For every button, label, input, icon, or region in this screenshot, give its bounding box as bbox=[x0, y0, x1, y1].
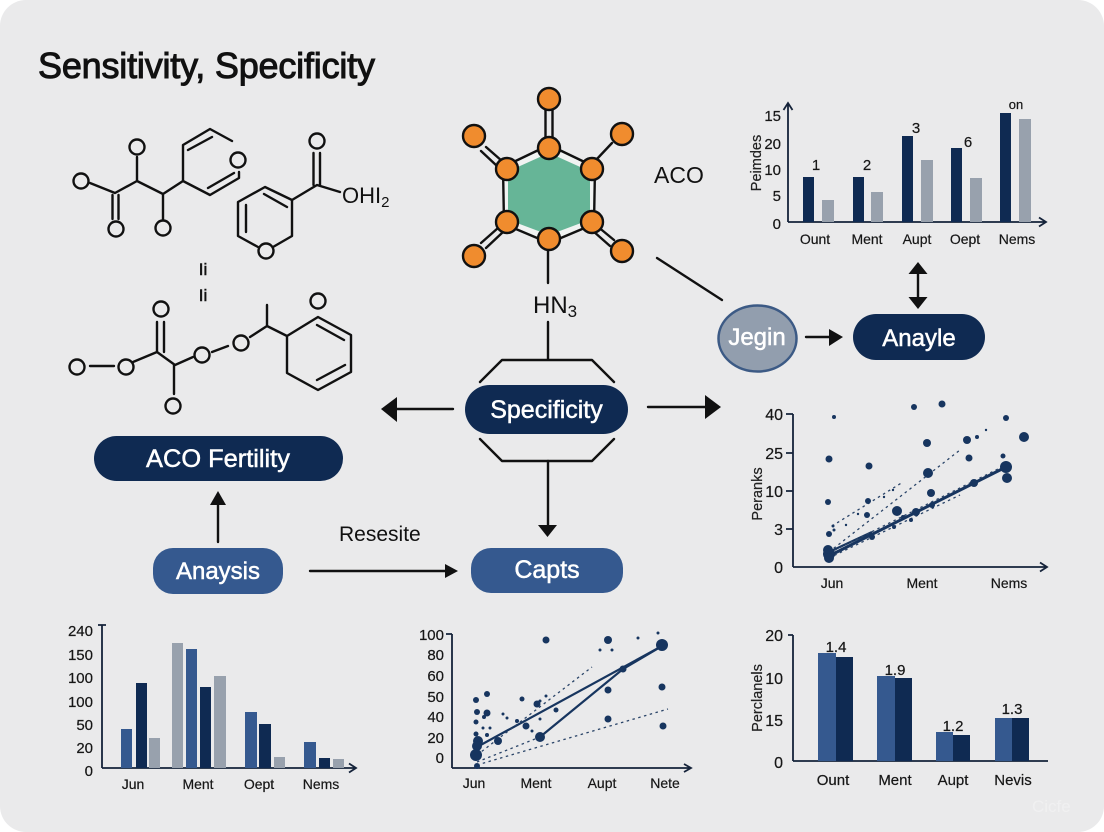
pill: Specificity: Specificity bbox=[490, 396, 603, 424]
pill: Anayle bbox=[853, 314, 985, 360]
label: HN3: 3 bbox=[568, 302, 577, 321]
bar chart: bottom left: Jun bbox=[122, 776, 144, 792]
bar chart: bottom right: Ount bbox=[817, 772, 850, 789]
scatter chart: bottom middle: Jun bbox=[463, 775, 485, 791]
pill: ACO Fertility bbox=[94, 436, 343, 481]
bar chart: top right: Ment bbox=[851, 231, 883, 247]
node: Jegin bbox=[718, 306, 796, 372]
bar chart: bottom left: 20 bbox=[76, 740, 93, 757]
pill: Capts bbox=[471, 548, 623, 593]
arrow: Jegin to Anayle bbox=[806, 329, 843, 346]
scatter chart: bottom middle: 80 bbox=[427, 647, 444, 664]
scatter chart: bottom middle: 0 bbox=[436, 750, 444, 767]
bar chart: top right: 0 bbox=[773, 216, 781, 233]
molecule: top middle ring with OHI2: OHI bbox=[342, 183, 381, 208]
scatter chart: bottom middle: 50 bbox=[427, 689, 444, 706]
arrow: Specificity to right bbox=[648, 395, 721, 419]
arrow: double headed between chart and Anayle bbox=[908, 262, 928, 309]
label: Ii marks: Ii bbox=[199, 260, 207, 279]
bar chart: bottom left: 240 bbox=[68, 623, 93, 640]
label: ACO: ACO bbox=[654, 162, 704, 188]
molecule: top middle ring with OHI2 bbox=[238, 134, 389, 258]
bar chart: bottom left: 50 bbox=[76, 717, 93, 734]
title: Sensitivity, Specificity bbox=[38, 45, 375, 86]
bar chart: top right: on bbox=[1009, 97, 1023, 112]
molecule: top left chain with ring bbox=[74, 129, 246, 236]
scatter chart: bottom middle: 100 bbox=[419, 627, 444, 644]
arrow: Anaysis to Capts bbox=[310, 564, 458, 578]
scatter chart: right: 40 bbox=[765, 407, 783, 424]
scatter chart: right: 3 bbox=[774, 522, 783, 539]
bar chart: bottom left: 100 bbox=[68, 694, 93, 711]
bar chart: top right bbox=[749, 97, 1046, 247]
molecule: lower left chain with ring bbox=[70, 294, 351, 414]
bar chart: top right: 6 bbox=[964, 134, 972, 151]
watermark: Cicfe bbox=[1032, 797, 1071, 816]
bar chart: top right: Ount bbox=[800, 231, 830, 247]
bar chart: bottom right: Perclanels bbox=[750, 664, 766, 732]
bar chart: bottom right: 1.9 bbox=[885, 662, 905, 679]
bar chart: bottom right: Aupt bbox=[938, 772, 969, 789]
scatter chart: bottom middle bbox=[419, 627, 691, 791]
arrow: Anaysis up to ACO Fertility bbox=[210, 491, 226, 542]
pill: Capts: Capts bbox=[514, 556, 580, 584]
arrow: Specificity to left bbox=[381, 397, 453, 422]
scatter chart: right bbox=[750, 400, 1047, 591]
bar chart: top right: 1 bbox=[812, 157, 820, 174]
scatter chart: right: Jun bbox=[821, 575, 843, 591]
scatter chart: right: 10 bbox=[765, 484, 783, 501]
bar chart: bottom right: 15 bbox=[765, 713, 783, 730]
label: HN3: HN bbox=[533, 292, 568, 319]
scatter chart: bottom middle: 40 bbox=[427, 709, 444, 726]
bar chart: top right: 20 bbox=[764, 136, 781, 153]
bar chart: top right: 10 bbox=[764, 162, 781, 179]
molecule: top middle ring with OHI2: 2 bbox=[381, 194, 389, 211]
bar chart: bottom right: 10 bbox=[765, 671, 783, 688]
label: Ii marks: Ii bbox=[199, 286, 207, 305]
bar chart: top right: Peimdes bbox=[749, 135, 765, 191]
bar chart: bottom left: 0 bbox=[85, 763, 93, 780]
bar chart: bottom right bbox=[750, 628, 1048, 789]
bar chart: bottom right: 0 bbox=[774, 755, 783, 772]
bar chart: top right: Oept bbox=[950, 231, 980, 247]
scatter chart: right: 0 bbox=[774, 560, 783, 577]
bar chart: top right: Nems bbox=[999, 231, 1035, 247]
bar chart: bottom right: 1.4 bbox=[826, 639, 846, 656]
scatter chart: right: Ment bbox=[906, 575, 938, 591]
connector: ACO to Jegin bbox=[657, 258, 722, 300]
pill: Anaysis: Anaysis bbox=[176, 558, 260, 585]
bar chart: top right: 3 bbox=[912, 120, 920, 137]
scatter chart: bottom middle: Nete bbox=[650, 775, 680, 791]
bar chart: bottom left: Ment bbox=[182, 776, 214, 792]
bar chart: bottom right: Nevis bbox=[994, 772, 1032, 789]
scatter chart: right: Nems bbox=[991, 575, 1027, 591]
pill: Anaysis bbox=[153, 548, 283, 594]
bar chart: bottom left: Oept bbox=[244, 776, 274, 792]
scatter chart: bottom middle: 60 bbox=[427, 668, 444, 685]
bar chart: bottom right: 20 bbox=[765, 628, 783, 645]
arrow: Specificity down to Capts bbox=[538, 461, 557, 537]
scatter chart: bottom middle: Ment bbox=[520, 775, 552, 791]
pill: Anayle: Anayle bbox=[882, 325, 956, 352]
scatter chart: right: 25 bbox=[765, 446, 783, 463]
bar chart: bottom right: Ment bbox=[878, 772, 912, 789]
scatter chart: bottom middle: 20 bbox=[427, 730, 444, 747]
molecule: central green hexagon with orange atoms bbox=[463, 88, 633, 283]
frame: hexagon brackets around Specificity bbox=[480, 322, 614, 461]
bar chart: top right: Aupt bbox=[903, 231, 932, 247]
node: Jegin: Jegin bbox=[728, 324, 786, 351]
label: Ii marks bbox=[199, 260, 207, 305]
pill: ACO Fertility: ACO Fertility bbox=[146, 445, 290, 473]
bar chart: bottom left bbox=[68, 623, 356, 792]
bar chart: bottom left: 150 bbox=[68, 647, 93, 664]
label: Resesite: Resesite bbox=[339, 523, 421, 546]
bar chart: top right: 15 bbox=[764, 108, 781, 125]
bar chart: top right: 5 bbox=[773, 188, 781, 205]
scatter chart: bottom middle: Aupt bbox=[588, 775, 617, 791]
bar chart: bottom right: 1.3 bbox=[1002, 701, 1022, 718]
bar chart: bottom right: 1.2 bbox=[943, 718, 963, 735]
bar chart: bottom left: Nems bbox=[303, 776, 339, 792]
bar chart: top right: 2 bbox=[863, 157, 871, 174]
scatter chart: right: Peranks bbox=[750, 467, 766, 521]
pill: Specificity bbox=[465, 385, 628, 434]
bar chart: bottom left: 100 bbox=[68, 670, 93, 687]
